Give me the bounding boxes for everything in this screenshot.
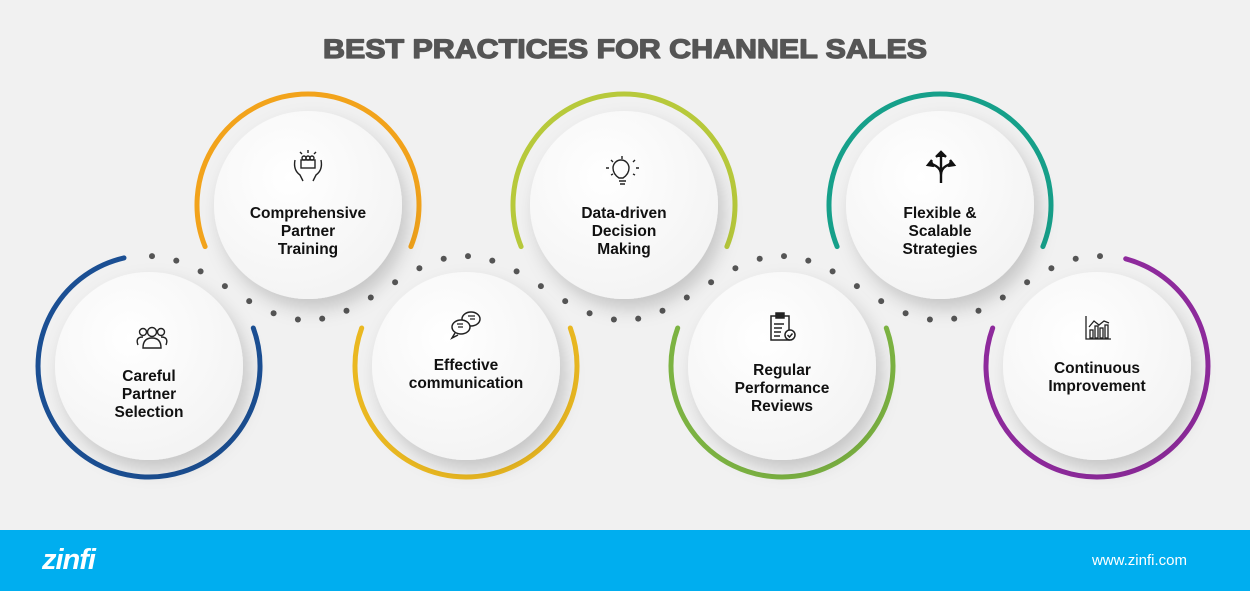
panel: careful partner selection: Partner bbox=[122, 386, 176, 403]
panel: flexible & scalable strategies bbox=[829, 94, 1051, 299]
panel: flexible & scalable strategies: Scalable bbox=[909, 223, 972, 240]
icon: people group bbox=[137, 328, 167, 348]
panel: flexible & scalable strategies: Flexible & bbox=[903, 205, 977, 222]
panel: data-driven decision making bbox=[513, 94, 735, 299]
panel: data-driven decision making: Data-driven bbox=[581, 205, 667, 222]
title: BEST PRACTICES FOR CHANNEL SALES bbox=[323, 34, 927, 64]
dotted wave connector bbox=[149, 253, 1103, 322]
icon: light bulb bbox=[606, 156, 639, 184]
panel: effective communication: communication bbox=[409, 375, 523, 392]
panel: effective communication: Effective bbox=[434, 357, 499, 374]
panel: continuous improvement: Improvement bbox=[1048, 378, 1146, 395]
panel: effective communication bbox=[355, 272, 577, 477]
icon: clipboard check bbox=[771, 313, 795, 340]
url: www.zinfi.com bbox=[1091, 552, 1187, 569]
icon: hands with team bbox=[295, 150, 321, 181]
panel: comprehensive partner training: Comprehensive bbox=[250, 205, 367, 222]
panel: continuous improvement bbox=[986, 259, 1208, 477]
panel: data-driven decision making: Decision bbox=[592, 223, 656, 240]
panel: careful partner selection: Careful bbox=[122, 368, 176, 385]
panel: comprehensive partner training: Training bbox=[278, 241, 338, 258]
panel: flexible & scalable strategies: Strategies bbox=[903, 241, 977, 258]
panel: careful partner selection bbox=[38, 258, 260, 477]
panel: data-driven decision making: Making bbox=[597, 241, 651, 258]
panel: continuous improvement: Continuous bbox=[1054, 360, 1140, 377]
icon: chat bubbles bbox=[452, 312, 480, 338]
panel: careful partner selection: Selection bbox=[115, 404, 183, 421]
panel: regular performance reviews: Regular bbox=[753, 362, 811, 379]
icon: bar chart bbox=[1086, 316, 1111, 339]
footer bar bbox=[0, 530, 1250, 591]
logo: zinfi bbox=[41, 544, 97, 576]
panel: comprehensive partner training bbox=[197, 94, 419, 299]
icon: split arrows bbox=[928, 152, 954, 183]
panel: regular performance reviews bbox=[671, 272, 893, 477]
panel: regular performance reviews: Performance bbox=[735, 380, 830, 397]
panel: comprehensive partner training: Partner bbox=[281, 223, 335, 240]
panel: regular performance reviews: Reviews bbox=[751, 398, 813, 415]
